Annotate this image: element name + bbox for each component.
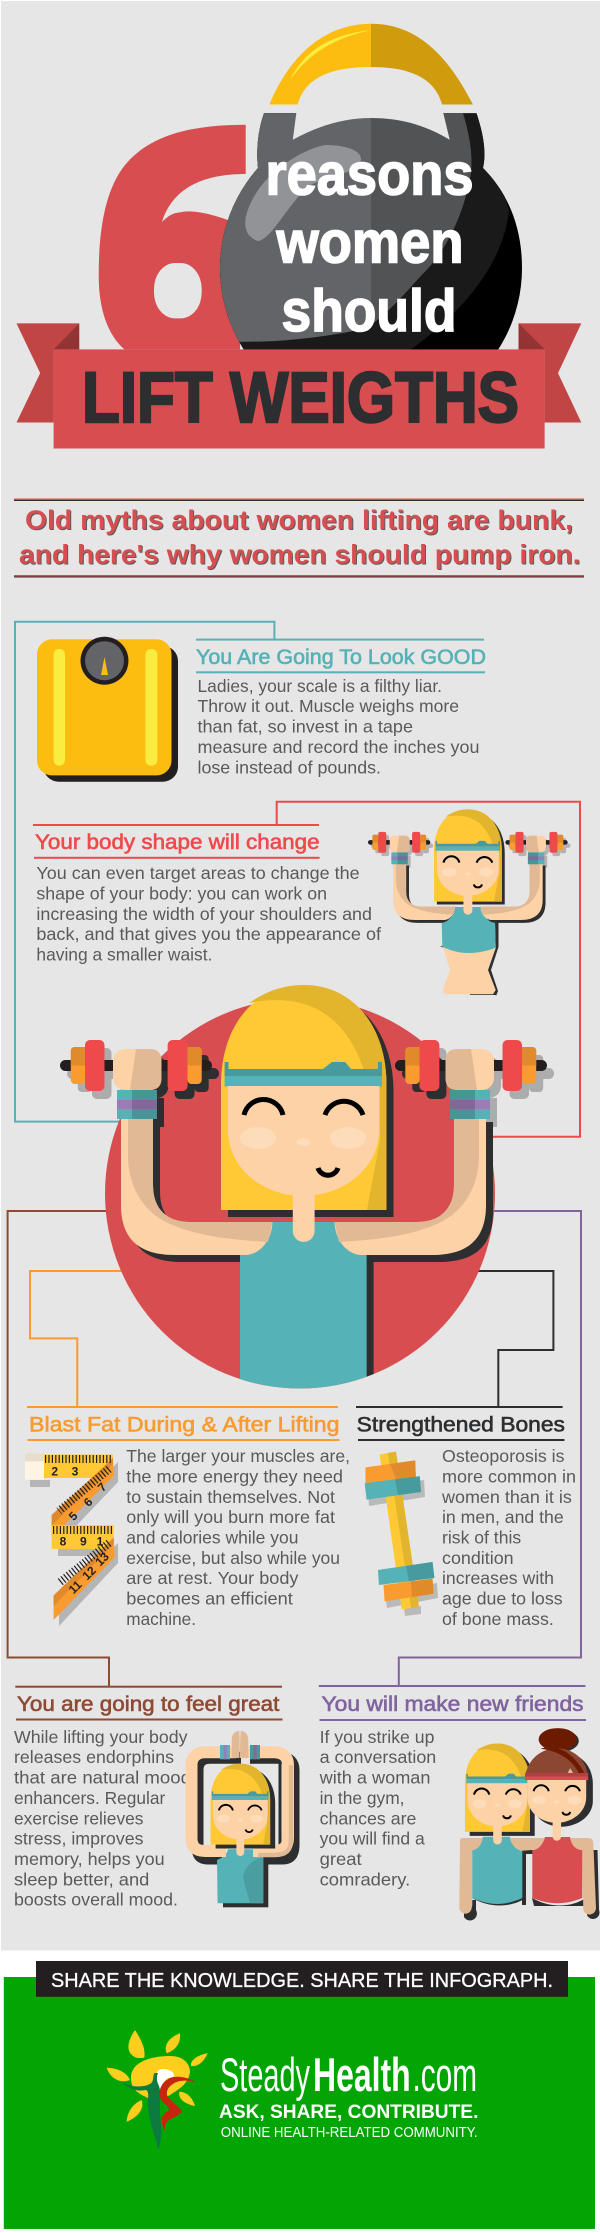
wordmark: steadyhealth.com bbox=[219, 2048, 478, 2141]
text block: new friends: comradery. bbox=[320, 1870, 410, 1890]
subtitle: old myths: Old myths about women lifting are bunk, bbox=[25, 505, 573, 535]
icon: bathroom scale bbox=[37, 637, 178, 782]
text block: new friends bbox=[319, 1727, 436, 1890]
heading: reasons women should: should bbox=[282, 278, 456, 344]
text block: blast fat bbox=[126, 1446, 350, 1629]
figure: woman with arms overhead bbox=[192, 1731, 294, 1907]
icon: steadyhealth logo bbox=[107, 2030, 208, 2150]
text block: blast fat: exercise, but also while you bbox=[126, 1548, 340, 1568]
text block: feel great: While lifting your body bbox=[14, 1727, 188, 1747]
text block: blast fat: only will you burn more fat bbox=[126, 1507, 335, 1527]
icon: measuring tape: 7 bbox=[95, 1480, 110, 1494]
heading: feel great: You are going to feel great bbox=[17, 1693, 280, 1716]
ribbon banner: lift weights: LIFT WEIGTHS bbox=[82, 358, 519, 438]
text block: body shape: increasing the width of your shoulders and bbox=[36, 904, 372, 924]
text block: bones bbox=[441, 1446, 576, 1629]
heading: reasons women should: reasons bbox=[266, 142, 474, 208]
heading: your body shape will change: Your body shape will change bbox=[35, 831, 320, 854]
heading: you are going to look good: You Are Going To Look GOOD bbox=[196, 646, 486, 669]
heading: new friends: You will make new friends bbox=[322, 1693, 584, 1716]
share bar bbox=[36, 1961, 568, 1997]
wordmark: steadyhealth.com: .com bbox=[412, 2048, 477, 2101]
icon: measuring tape: 1 bbox=[97, 1534, 104, 1548]
panel: look good bbox=[37, 637, 486, 782]
wordmark: steadyhealth.com: ASK, SHARE, CONTRIBUTE. bbox=[219, 2101, 478, 2123]
text block: body shape: back, and that gives you the appearance of bbox=[36, 924, 381, 944]
ribbon banner: lift weights bbox=[16, 323, 581, 448]
text block: body shape: shape of your body: you can work on bbox=[36, 884, 327, 904]
text block: bones: Osteoporosis is bbox=[442, 1446, 565, 1466]
text block: new friends: chances are bbox=[320, 1808, 416, 1828]
icon: measuring tape bbox=[25, 1453, 118, 1626]
text block: scale: lose instead of pounds. bbox=[198, 757, 381, 777]
text block: feel great: boosts overall mood. bbox=[14, 1890, 178, 1910]
panel: body shape bbox=[33, 809, 571, 996]
icon: measuring tape: 6 bbox=[81, 1495, 96, 1509]
text block: body shape bbox=[36, 863, 381, 965]
panel: strengthened bones bbox=[356, 1406, 576, 1629]
text block: blast fat: the more energy they need bbox=[126, 1466, 343, 1486]
text block: new friends: in the gym, bbox=[320, 1788, 404, 1808]
icon: measuring tape: 5 bbox=[66, 1509, 81, 1523]
panel: new friends bbox=[319, 1685, 599, 1920]
text block: new friends: If you strike up bbox=[320, 1727, 434, 1747]
text block: body shape: having a smaller waist. bbox=[36, 945, 212, 965]
icon: measuring tape: 12 bbox=[79, 1563, 99, 1583]
blonde friend bbox=[465, 1744, 535, 1844]
title illustration: kettlebell and six bbox=[99, 24, 540, 360]
icon: measuring tape: 11 bbox=[66, 1578, 85, 1597]
text block: blast fat: to sustain themselves. Not bbox=[126, 1487, 335, 1507]
text block: feel great: sleep better, and bbox=[14, 1870, 149, 1890]
text block: scale: Ladies, your scale is a filthy liar. bbox=[198, 676, 442, 696]
connector lines bbox=[8, 622, 581, 1687]
wordmark: steadyhealth.com: Health bbox=[313, 2048, 411, 2101]
subtitle: old myths: and here's why women should pump iron. bbox=[19, 540, 580, 570]
heading: reasons women should: women bbox=[276, 210, 464, 276]
text block: bones: condition bbox=[442, 1548, 514, 1568]
text block: feel great: releases endorphins bbox=[14, 1747, 174, 1767]
text block: bones: in men, and the bbox=[442, 1507, 564, 1527]
text block: bones: of bone mass. bbox=[442, 1609, 554, 1629]
heading: reasons women should bbox=[266, 142, 474, 344]
wordmark: steadyhealth.com: ONLINE HEALTH-RELATED COMMUNITY. bbox=[221, 2125, 478, 2141]
text block: feel great bbox=[14, 1727, 191, 1910]
share bar: SHARE THE KNOWLEDGE. SHARE THE INFOGRAPH. bbox=[51, 1969, 553, 1992]
text block: blast fat: becomes an efficient bbox=[126, 1589, 293, 1609]
wordmark: steadyhealth.com: Steady bbox=[220, 2048, 310, 2101]
text block: new friends: you will find a bbox=[320, 1829, 425, 1849]
text block: new friends: a conversation bbox=[320, 1747, 436, 1767]
text block: feel great: stress, improves bbox=[14, 1829, 144, 1849]
text block: scale: than fat, so invest in a tape bbox=[198, 717, 413, 737]
subtitle: old myths: Old myths about women lifting are bunk, bbox=[26, 506, 574, 536]
subtitle: old myths bbox=[14, 498, 584, 578]
text block: bones: more common in bbox=[442, 1466, 576, 1486]
kettlebell handle bbox=[269, 24, 473, 105]
icon: measuring tape: 9 bbox=[80, 1534, 87, 1548]
kettlebell body bbox=[220, 113, 522, 350]
panel: feel great bbox=[14, 1686, 294, 1910]
text block: blast fat: machine. bbox=[126, 1609, 196, 1629]
text block: feel great: that are natural mood bbox=[14, 1768, 191, 1788]
heading: strengthened bones: Strengthened Bones bbox=[357, 1413, 565, 1436]
icon: measuring tape: 2 bbox=[51, 1464, 58, 1478]
icon: measuring tape: 8 bbox=[60, 1534, 67, 1548]
text block: blast fat: are at rest. Your body bbox=[126, 1568, 299, 1588]
text block: blast fat: The larger your muscles are, bbox=[126, 1446, 350, 1466]
figure: two women friends bbox=[459, 1728, 599, 1920]
text block: scale: measure and record the inches you bbox=[198, 737, 480, 757]
text block: scale: Throw it out. Muscle weighs more bbox=[198, 696, 459, 716]
text block: bones: increases with bbox=[442, 1568, 554, 1588]
heading: blast fat: Blast Fat During & After Lifting bbox=[29, 1413, 340, 1436]
text block: bones: risk of this bbox=[442, 1528, 521, 1548]
big numeral six bbox=[99, 125, 246, 349]
red circle bbox=[105, 998, 495, 1388]
text block: new friends: with a woman bbox=[319, 1768, 430, 1788]
icon: dumbbell bbox=[365, 1452, 438, 1616]
text block: bones: women than it is bbox=[441, 1487, 572, 1507]
text block: scale bbox=[198, 676, 480, 777]
figure: large woman lifting dumbbells in red circle bbox=[60, 985, 554, 1400]
text block: feel great: memory, helps you bbox=[14, 1849, 165, 1869]
figure: small woman lifting dumbbells bbox=[368, 809, 571, 996]
brunette friend bbox=[525, 1728, 593, 1841]
text block: body shape: You can even target areas to change the bbox=[36, 863, 360, 883]
icon: measuring tape: 3 bbox=[72, 1464, 79, 1478]
text block: feel great: exercise relieves bbox=[14, 1808, 144, 1828]
panel: blast fat bbox=[25, 1406, 350, 1629]
text block: new friends: great bbox=[320, 1849, 362, 1869]
text block: feel great: enhancers. Regular bbox=[14, 1788, 165, 1808]
text block: bones: age due to loss bbox=[442, 1589, 563, 1609]
subtitle: old myths: and here's why women should pump iron. bbox=[20, 541, 582, 571]
icon: measuring tape: 13 bbox=[92, 1549, 112, 1569]
footer: green panel bbox=[4, 1977, 595, 2229]
text block: blast fat: and calories while you bbox=[126, 1528, 298, 1548]
